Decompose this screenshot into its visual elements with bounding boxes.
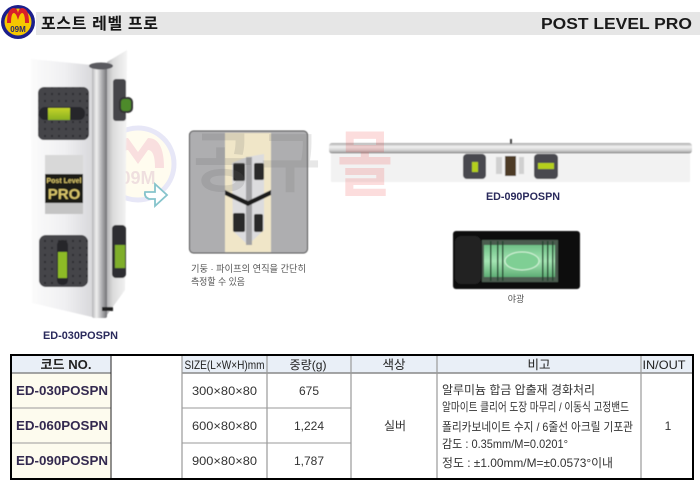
bottom vertical vial holder	[39, 235, 88, 287]
bar	[329, 143, 692, 154]
header labels: 코드 NO.	[40, 357, 92, 372]
photo: glowing vial	[453, 231, 580, 289]
title: English: POST LEVEL PRO	[541, 16, 692, 33]
side top holder	[113, 79, 126, 121]
grid lines	[12, 355, 692, 478]
header labels: 비고	[527, 358, 551, 372]
top horizontal vial holder	[38, 87, 89, 140]
notes: 정도 : ±1.00mm/M=±0.0573°이내	[442, 456, 613, 470]
strap	[225, 190, 271, 206]
notes: 알마이트 클리어 도장 마무리 / 이동식 고정밴드	[442, 400, 629, 414]
right holder	[534, 154, 558, 179]
clamp knob	[102, 307, 113, 311]
sizes: 300×80×80	[192, 384, 257, 398]
side bottom holder	[112, 225, 126, 278]
logo	[1, 5, 35, 39]
watermark: Korean lettering: 구	[260, 126, 321, 200]
watermark: Korean lettering	[193, 126, 393, 206]
left plate	[31, 59, 92, 317]
model codes: ED-030POSPN	[16, 384, 108, 398]
header row background	[11, 355, 692, 373]
product code: ED-030POSPN: ED-030POSPN	[43, 330, 118, 342]
watermark: Korean lettering: 공	[193, 126, 254, 200]
blank column	[111, 355, 182, 478]
level	[232, 154, 264, 245]
header labels: SIZE(L×W×H)mm	[184, 358, 264, 372]
specification table	[11, 355, 693, 479]
product: ED-090POSPN long level	[329, 139, 692, 182]
post cap	[89, 62, 113, 70]
product: ED-030POSPN post level: Post Level	[46, 178, 82, 185]
sizes	[192, 384, 257, 468]
sizes: 900×80×80	[192, 454, 257, 468]
weights: 675	[299, 384, 319, 398]
notes: 감도 : 0.35mm/M=0.0201°	[442, 437, 568, 451]
watermark: faint logo: 09M	[120, 168, 156, 188]
notes: 폴리카보네이트 수지 / 6줄선 아크릴 기포관	[442, 420, 633, 434]
model codes: ED-060POSPN	[16, 419, 108, 433]
model codes: ED-090POSPN	[16, 454, 108, 468]
photo caption	[191, 264, 306, 288]
photo: level strapped to wooden post	[190, 131, 308, 253]
notes: 알루미늄 합금 압출재 경화처리	[442, 383, 595, 397]
photo caption: 측정할 수 있음	[191, 276, 245, 288]
header bar	[36, 12, 700, 35]
watermark: Korean lettering: 몰	[337, 126, 393, 206]
label	[505, 156, 516, 176]
post	[92, 66, 107, 318]
header labels: 중량(g)	[290, 358, 327, 372]
title: Korean: 포스트 레벨 프로	[41, 15, 158, 33]
vial caption: 야광	[508, 293, 524, 304]
weights: 1,224	[294, 419, 324, 433]
left holder	[463, 154, 486, 179]
code column background	[12, 373, 111, 478]
label	[45, 155, 83, 174]
table outer border	[11, 355, 693, 479]
in/out quantity: 1	[665, 419, 672, 433]
right plate	[107, 50, 127, 315]
knob	[510, 139, 512, 144]
photo caption: 기둥 · 파이프의 연직을 간단히	[191, 264, 306, 275]
product: ED-030POSPN post level: PRO	[48, 186, 81, 203]
plate	[331, 154, 690, 182]
arrow	[145, 184, 167, 206]
notes	[442, 383, 633, 470]
vial holders	[233, 163, 245, 181]
watermark: faint logo	[102, 128, 174, 200]
colour: 실버	[384, 419, 406, 433]
header labels	[40, 357, 686, 372]
sizes: 600×80×80	[192, 419, 257, 433]
weights: 1,787	[294, 454, 324, 468]
product code: ED-090POSPN: ED-090POSPN	[486, 191, 560, 203]
header labels: 색상	[382, 358, 406, 372]
wooden post	[225, 133, 271, 252]
product: ED-030POSPN post level	[31, 50, 132, 318]
logo: 09M	[10, 25, 26, 34]
model codes	[16, 384, 108, 468]
weights	[294, 384, 324, 468]
header labels: IN/OUT	[642, 358, 686, 372]
